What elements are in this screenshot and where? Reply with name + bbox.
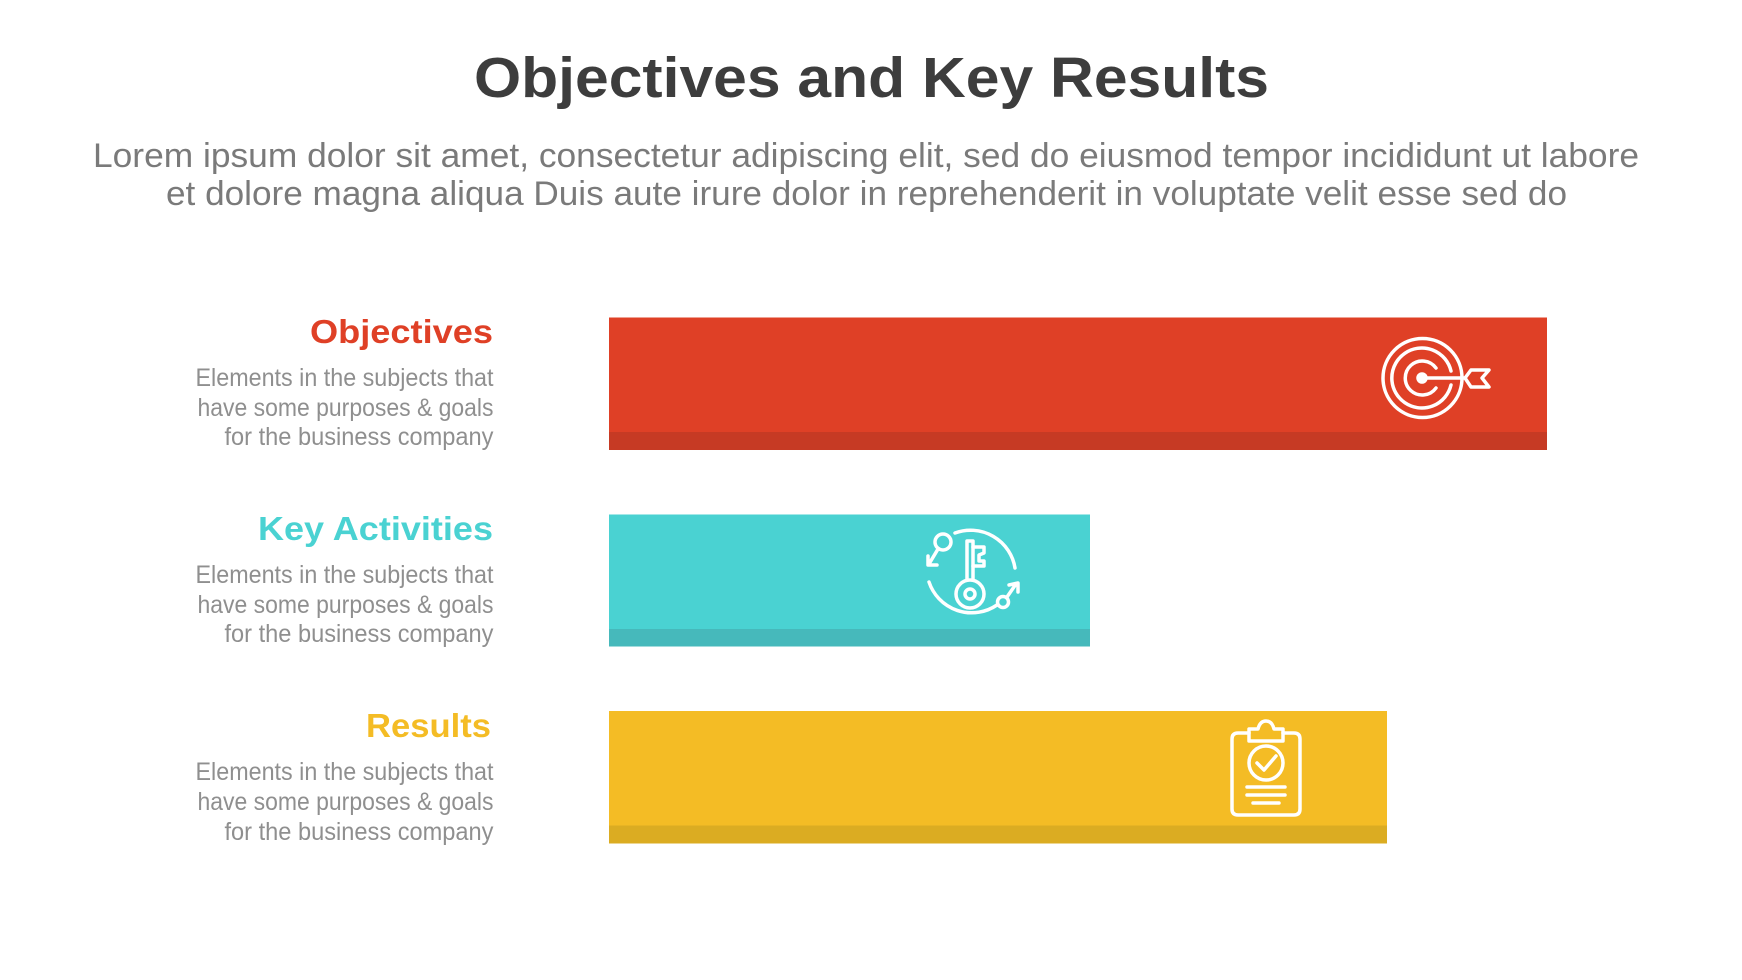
description: key activities	[196, 561, 494, 648]
heading: key activities: Key Activities	[258, 510, 493, 547]
description: results: have some purposes & goals	[198, 788, 494, 816]
description: key activities: Elements in the subjects that	[196, 561, 494, 589]
heading: objectives: Objectives	[310, 313, 493, 350]
panel: objectives label	[196, 313, 494, 451]
description: objectives: for the business company	[224, 423, 494, 451]
description: objectives: Elements in the subjects that	[196, 364, 494, 392]
subtitle text block: et dolore magna aliqua Duis aute irure dolor in reprehenderit in voluptate velit esse sed do	[166, 175, 1567, 213]
title: Objectives and Key Results	[474, 46, 1269, 110]
icon: target with arrow	[1383, 338, 1489, 418]
description: results	[196, 758, 494, 846]
heading: results: Results	[366, 707, 491, 744]
bar: results	[609, 711, 1387, 844]
description: objectives: have some purposes & goals	[198, 394, 494, 422]
panel: key activities label	[196, 510, 494, 648]
subtitle text block	[93, 137, 1639, 213]
description: key activities: for the business company	[224, 620, 494, 648]
description: results: Elements in the subjects that	[196, 758, 494, 786]
description: key activities: have some purposes & goals	[198, 591, 494, 619]
icon: key in cycle	[928, 530, 1018, 613]
bar: key activities	[609, 514, 1090, 646]
description: results: for the business company	[224, 818, 494, 846]
subtitle text block: Lorem ipsum dolor sit amet, consectetur adipiscing elit, sed do eiusmod tempor incididunt ut labore	[93, 137, 1639, 175]
description: objectives	[196, 364, 494, 451]
icon: clipboard with check	[1232, 721, 1300, 815]
panel: results label	[196, 707, 494, 846]
bar: objectives	[609, 318, 1547, 450]
